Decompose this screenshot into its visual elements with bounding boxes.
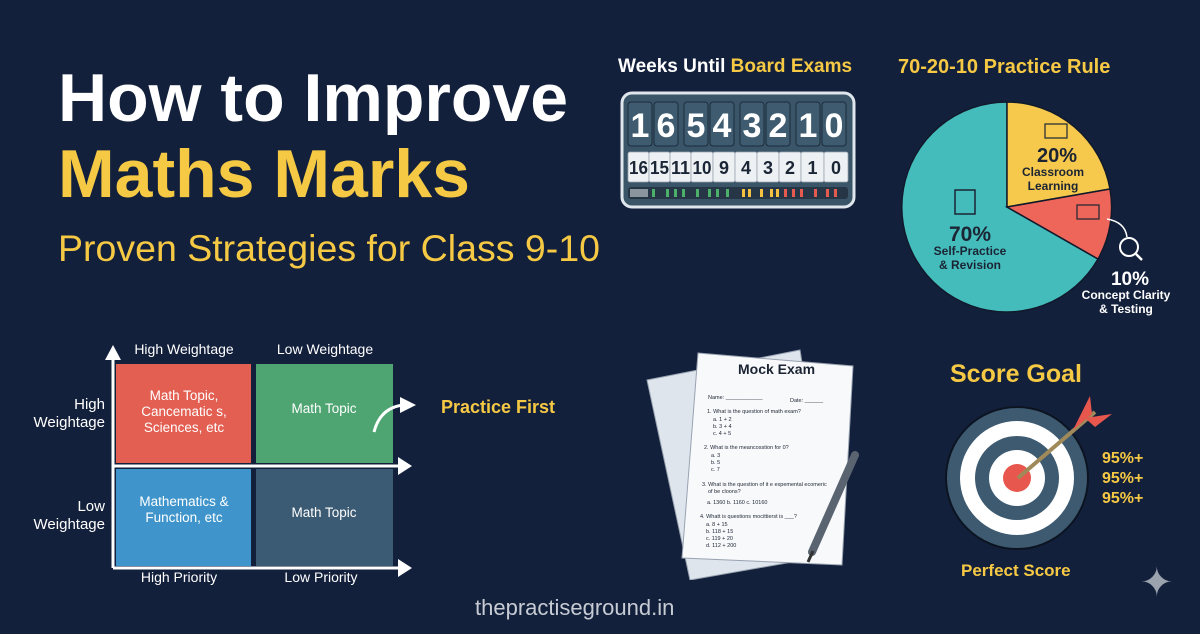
countdown board: 0 [831, 158, 841, 178]
mock exam papers: c. 4 + 5 [713, 431, 731, 437]
countdown board: 4 [741, 158, 751, 178]
mock exam papers: 2. What is the meancosstion for 0? [704, 445, 789, 451]
priority matrix: Cancematic s, [141, 404, 227, 419]
countdown board: 11 [671, 158, 690, 178]
priority matrix: High Priority [141, 569, 217, 585]
priority matrix: Function, etc [145, 510, 223, 525]
countdown board: 6 [657, 107, 675, 145]
mock exam papers: b. 5 [711, 460, 720, 466]
priority matrix: Low Priority [284, 569, 358, 585]
title: How to Improve [58, 60, 568, 136]
target icon [945, 396, 1112, 550]
priority matrix: Low [77, 498, 105, 515]
title: Maths Marks [58, 136, 470, 212]
countdown board: 4 [713, 107, 732, 145]
mock exam papers: a. 1 + 2 [713, 417, 732, 423]
pie chart: & Revision [939, 258, 1001, 272]
countdown board: 0 [825, 107, 843, 145]
mock exam papers: Mock Exam [738, 361, 815, 377]
score goal heading: Score Goal [950, 360, 1082, 388]
score values [1102, 450, 1143, 507]
quadrant: blue [116, 469, 251, 566]
countdown board: 1 [807, 158, 818, 178]
priority matrix: Math Topic [291, 401, 357, 416]
pie chart: Classroom [1022, 165, 1084, 179]
priority matrix: Low Weightage [277, 341, 373, 357]
priority matrix: Practice First [441, 397, 555, 417]
priority matrix: Math Topic [291, 505, 357, 520]
mock exam papers: Date: ______ [790, 398, 824, 404]
priority matrix: High Weightage [134, 341, 234, 357]
mock exam papers: b. 3 + 4 [713, 424, 732, 430]
countdown board: 16 [629, 158, 648, 178]
pie heading: 70-20-10 Practice Rule [898, 56, 1110, 78]
priority matrix: Weightage [34, 516, 105, 533]
countdown heading: Weeks Until Board Exams [618, 56, 852, 77]
countdown board: 9 [719, 158, 729, 178]
countdown board: 5 [687, 107, 705, 145]
countdown board: 1 [631, 107, 649, 145]
pie chart: Learning [1028, 179, 1078, 193]
countdown board [620, 92, 856, 208]
countdown board: 1 [799, 107, 817, 145]
pie chart [901, 101, 1171, 316]
mock exam papers: a. 1360 b. 1160 c. 10160 [707, 500, 767, 506]
countdown board: 3 [763, 158, 773, 178]
subtitle: Proven Strategies for Class 9-10 [58, 227, 600, 269]
title [58, 60, 568, 212]
priority matrix: High [74, 396, 105, 413]
quadrant: slate [256, 469, 393, 566]
mock exam papers: c. 119 + 20 [706, 536, 733, 542]
mock exam papers: 1. What is the question of math exam? [707, 409, 801, 415]
countdown board: 10 [692, 158, 712, 178]
sparkle icon: ✦ [1140, 561, 1174, 605]
countdown board: 3 [743, 107, 761, 145]
pie chart: 10% [1111, 269, 1149, 290]
perfect score label: Perfect Score [961, 561, 1071, 580]
score values: 95%+ [1102, 490, 1143, 507]
pie chart: Self-Practice [934, 244, 1007, 258]
pie chart: & Testing [1099, 302, 1153, 316]
quadrant: red [116, 364, 251, 463]
mock exam papers: a. 3 [711, 453, 720, 459]
mock exam papers: d. 112 + 200 [706, 543, 736, 549]
mock exam papers: a. 8 + 15 [706, 522, 728, 528]
pie chart: 20% [1037, 145, 1077, 167]
mock exam papers [646, 349, 859, 580]
mock exam papers: of be cloons? [708, 489, 741, 495]
quadrant: green [256, 364, 393, 463]
priority matrix: Math Topic, [150, 388, 218, 403]
countdown board: 2 [769, 107, 787, 145]
mock exam papers: Name: ____________ [708, 395, 763, 401]
pie chart: Concept Clarity [1082, 288, 1171, 302]
priority matrix: Mathematics & [139, 494, 229, 509]
score values: 95%+ [1102, 470, 1143, 487]
priority matrix: Weightage [34, 414, 105, 431]
priority matrix: Sciences, etc [144, 420, 224, 435]
pie chart: 70% [949, 223, 991, 246]
countdown board: 15 [650, 158, 669, 178]
score values: 95%+ [1102, 450, 1143, 467]
priority matrix [34, 341, 555, 585]
footer url: thepractiseground.in [475, 595, 674, 620]
mock exam papers: 4. Whatt is questions mocittierst is ___? [700, 514, 797, 520]
countdown board: 2 [785, 158, 795, 178]
mock exam papers: b. 118 + 15 [706, 529, 733, 535]
mock exam papers: 3. What is the question of it e expemental ecomeric [702, 482, 827, 488]
mock exam papers: c. 7 [711, 467, 720, 473]
